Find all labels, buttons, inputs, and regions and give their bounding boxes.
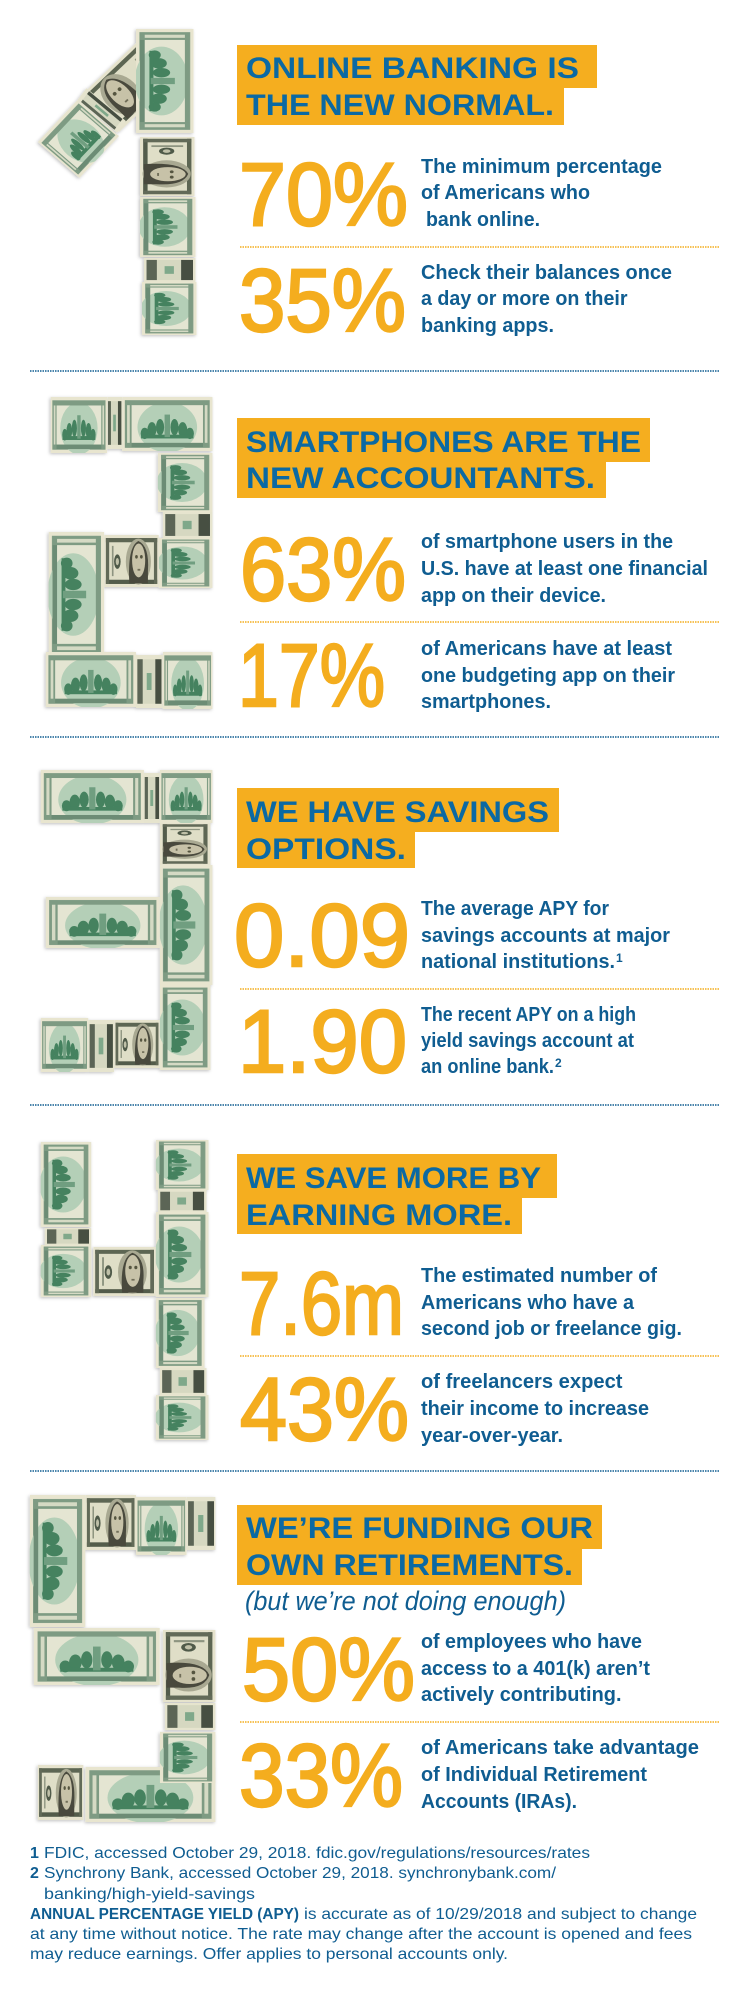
stat: 1.90: The recent APY on a high: [421, 1004, 636, 1026]
heading: [237, 45, 597, 125]
stat: 17%: one budgeting app on their: [421, 665, 675, 687]
stat: 17%: smartphones.: [421, 691, 551, 713]
stat: 50%: of employees who have: [421, 1631, 642, 1653]
stat: 7.6m: The estimated number of: [421, 1265, 657, 1287]
section 5: retirement: [28, 1495, 720, 1825]
stat: 7.6m: Americans who have a: [421, 1292, 635, 1314]
stat: 1.90: an online bank.: [421, 1056, 554, 1078]
stat: 50%: 50%: [242, 1619, 415, 1719]
heading: [237, 1154, 557, 1234]
heading: WE SAVE MORE BY: [246, 1162, 541, 1195]
icon: number four made of dollar bills: [40, 1140, 208, 1440]
heading: [237, 788, 559, 868]
icon: number five made of dollar bills: [28, 1495, 215, 1823]
footnotes: banking/high-yield-savings: [44, 1886, 255, 1903]
stat: 70%: [239, 144, 662, 244]
footnotes: [30, 1845, 697, 1963]
stat: 0.09: 0.09: [234, 885, 410, 985]
heading: THE NEW NORMAL.: [246, 89, 554, 122]
section 1: online banking: [38, 29, 720, 350]
stat: 0.09: The average APY for: [421, 898, 609, 920]
stat: 43%: 43%: [240, 1359, 409, 1459]
stat: 63%: of smartphone users in the: [421, 531, 673, 553]
icon: number one made of dollar bills: [38, 29, 197, 335]
stat: 33%: of Individual Retirement: [421, 1764, 647, 1786]
section 3: savings options: [41, 770, 720, 1091]
stat: 70%: The minimum percentage: [421, 156, 662, 178]
stat: 63%: app on their device.: [421, 585, 606, 607]
stat: 1.90: [238, 991, 636, 1091]
heading: SMARTPHONES ARE THE: [246, 426, 641, 459]
stat: 33%: 33%: [239, 1725, 403, 1825]
stat: 1.90: 1.90: [238, 991, 407, 1091]
stat: 35%: [239, 250, 672, 350]
footnotes: may reduce earnings. Offer applies to personal accounts only.: [30, 1946, 508, 1963]
stat: 1.90: yield savings account at: [421, 1030, 634, 1052]
stat: 43%: of freelancers expect: [421, 1371, 623, 1393]
footnotes: FDIC, accessed October 29, 2018. fdic.gov/regulations/resources/rates: [44, 1845, 590, 1862]
footnotes: at any time without notice. The rate may change after the account is opened and fees: [30, 1926, 692, 1943]
footnotes: 2: [30, 1865, 39, 1882]
section 2: smartphones: [46, 397, 720, 725]
heading: OWN RETIREMENTS.: [246, 1549, 573, 1582]
stat: 7.6m: second job or freelance gig.: [421, 1318, 682, 1340]
icon: number three made of dollar bills: [41, 770, 212, 1073]
stat: 17%: of Americans have at least: [421, 638, 672, 660]
stat: 63%: 63%: [240, 519, 406, 619]
stat: 0.09: savings accounts at major: [421, 925, 670, 947]
stat: 1.90: 2: [555, 1056, 562, 1070]
heading: EARNING MORE.: [246, 1199, 512, 1232]
icon: number two made of dollar bills: [46, 397, 212, 710]
stat: 33%: of Americans take advantage: [421, 1737, 699, 1759]
stat: 50%: access to a 401(k) aren’t: [421, 1658, 650, 1680]
stat: 70%: 70%: [239, 144, 408, 244]
stat: 70%: of Americans who: [421, 182, 590, 204]
stat: 35%: a day or more on their: [421, 288, 628, 310]
footnotes: ANNUAL PERCENTAGE YIELD (APY): [30, 1906, 299, 1923]
heading: [237, 1505, 602, 1585]
stat: 43%: year-over-year.: [421, 1425, 563, 1447]
stat: 63%: [240, 519, 708, 619]
heading: WE’RE FUNDING OUR: [246, 1512, 593, 1545]
subheading: (but we’re not doing enough): [245, 1586, 566, 1616]
stat: 70%: bank online.: [426, 209, 540, 231]
stat: 0.09: 1: [616, 951, 623, 965]
heading: [237, 418, 650, 498]
heading: WE HAVE SAVINGS: [246, 796, 549, 829]
footnotes: 1: [30, 1845, 39, 1862]
stat: 43%: their income to increase: [421, 1398, 649, 1420]
heading: ONLINE BANKING IS: [246, 52, 579, 85]
section 4: earning more: [40, 1140, 720, 1459]
stat: 35%: 35%: [239, 250, 406, 350]
stat: 7.6m: [239, 1253, 682, 1353]
stat: 35%: banking apps.: [421, 315, 554, 337]
stat: 17%: 17%: [238, 625, 385, 725]
stat: 0.09: national institutions.: [421, 951, 615, 973]
stat: 43%: [240, 1359, 649, 1459]
heading: OPTIONS.: [246, 833, 406, 866]
stat: 33%: [239, 1725, 699, 1825]
stat: 50%: actively contributing.: [421, 1684, 622, 1706]
footnotes: is accurate as of 10/29/2018 and subject to change: [304, 1906, 697, 1923]
stat: 35%: Check their balances once: [421, 262, 672, 284]
heading: NEW ACCOUNTANTS.: [246, 462, 595, 495]
stat: 50%: [242, 1619, 650, 1719]
stat: 33%: Accounts (IRAs).: [421, 1791, 577, 1813]
stat: 63%: U.S. have at least one financial: [421, 558, 708, 580]
stat: 7.6m: 7.6m: [239, 1253, 404, 1353]
footnotes: Synchrony Bank, accessed October 29, 2018. synchronybank.com/: [44, 1865, 557, 1882]
stat: 0.09: [234, 885, 670, 985]
stat: 17%: [238, 625, 675, 725]
